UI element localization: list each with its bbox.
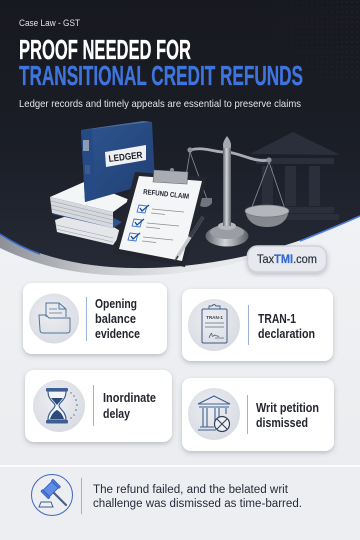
pill: TaxTMI.com bbox=[248, 246, 326, 272]
card: inordinate delay bbox=[25, 370, 172, 442]
card label: Inordinate bbox=[103, 390, 156, 405]
card label: Writ petition bbox=[256, 400, 319, 415]
card: opening balance evidence bbox=[23, 283, 167, 354]
icon: court with cross bbox=[188, 388, 240, 440]
footer panel bbox=[0, 465, 360, 540]
subtitle: Ledger records and timely appeals are essential to preserve claims bbox=[19, 99, 301, 110]
card label: delay bbox=[103, 406, 131, 421]
illustration: ledger binder bbox=[81, 121, 155, 202]
card label bbox=[258, 311, 315, 341]
pen bbox=[175, 217, 203, 261]
card label: dismissed bbox=[256, 415, 308, 430]
card label bbox=[256, 400, 319, 430]
icon: folder bbox=[29, 294, 79, 344]
card label: Opening bbox=[95, 296, 137, 311]
title bbox=[19, 34, 303, 91]
illustration: scales of justice bbox=[182, 136, 289, 246]
card label: TRAN-1 bbox=[258, 311, 296, 326]
card label bbox=[103, 390, 156, 421]
title: PROOF NEEDED FOR bbox=[19, 34, 191, 65]
clipboard checklist bbox=[128, 205, 184, 242]
footer text: challenge was dismissed as time-barred. bbox=[93, 498, 302, 510]
icon: TRAN-1 clipboard: TRAN-1 bbox=[206, 315, 223, 320]
header panel bbox=[0, 0, 360, 276]
icon: hourglass bbox=[33, 380, 85, 432]
illustration: paper stack bbox=[50, 182, 130, 245]
icon: TRAN-1 clipboard bbox=[188, 299, 240, 351]
illustration: refund claim clipboard bbox=[113, 168, 207, 267]
footer text bbox=[93, 484, 302, 510]
icon: ghost courthouse bbox=[247, 132, 340, 220]
card: TRAN-1 declaration bbox=[182, 289, 333, 361]
card label: declaration bbox=[258, 326, 315, 341]
card label: balance bbox=[95, 311, 136, 326]
card label: evidence bbox=[95, 326, 140, 341]
card: writ petition dismissed bbox=[182, 378, 334, 451]
binder label: LEDGER bbox=[108, 150, 143, 165]
icon: gavel bbox=[32, 474, 72, 516]
card label bbox=[95, 296, 140, 341]
pill: TaxTMI.com: TaxTMI.com bbox=[257, 253, 317, 266]
clipboard heading: REFUND CLAIM bbox=[143, 187, 189, 201]
footer text: The refund failed, and the belated writ bbox=[93, 484, 289, 496]
eyebrow: case law: Case Law - GST bbox=[19, 18, 80, 28]
